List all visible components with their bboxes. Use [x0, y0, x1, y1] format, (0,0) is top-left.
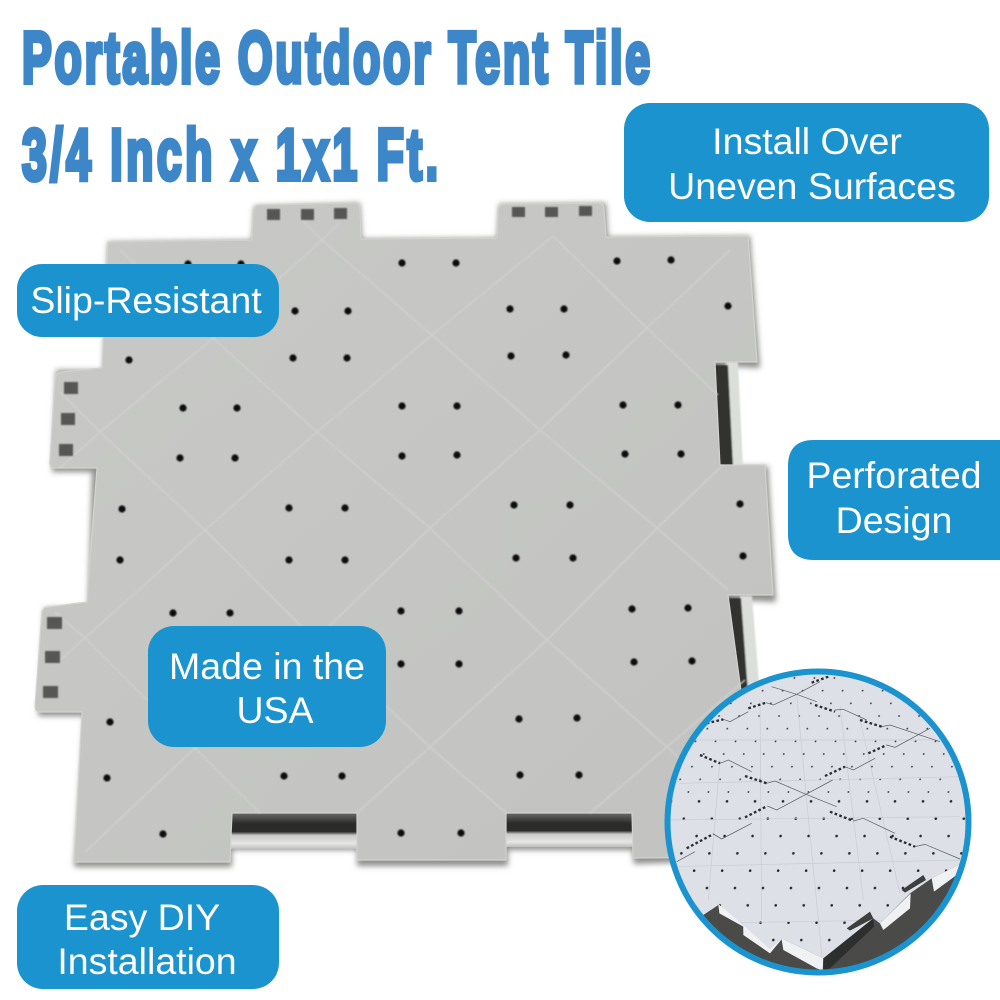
slots on the bottom edge	[230, 813, 634, 849]
floor surface	[670, 674, 966, 958]
callout: slip-resistant: Slip-Resistant	[30, 279, 262, 321]
interlock tabs with holes	[687, 677, 915, 848]
callout: made in the USA	[148, 626, 386, 747]
perforation dots near	[672, 800, 966, 942]
perforation holes	[103, 256, 747, 838]
callout: perforated design: Design	[836, 499, 952, 541]
circle frame	[668, 672, 968, 972]
title	[22, 18, 650, 195]
callout: easy DIY installation: Installation	[57, 940, 237, 982]
perforation dots far	[679, 677, 960, 793]
product photo: interlocking perforated tile	[35, 203, 776, 867]
callout: install over uneven surfaces	[624, 103, 989, 222]
title: 3/4 Inch x 1x1 Ft.	[22, 115, 438, 195]
tile drop shadow	[38, 203, 776, 867]
callout: easy DIY installation	[17, 885, 279, 989]
callout: install over uneven surfaces: Install Over	[712, 120, 902, 162]
callout: install over uneven surfaces: Uneven Surfaces	[668, 165, 956, 207]
tile diagonal grooves	[55, 218, 745, 852]
faint tile grid lines	[670, 694, 960, 970]
tile body	[35, 203, 773, 862]
callout: made in the USA: USA	[236, 689, 314, 731]
callout: perforated design: Perforated	[806, 454, 982, 496]
inset photo: installed floor in circular frame	[660, 660, 980, 985]
slots on the right edge	[714, 362, 762, 720]
callout: perforated design	[788, 440, 1000, 560]
gravel ground and side faces	[703, 864, 960, 970]
callout: easy DIY installation: Easy DIY	[64, 896, 220, 938]
square pockets on the tabs	[43, 206, 592, 698]
title: Portable Outdoor Tent Tile	[22, 18, 650, 98]
callout: slip-resistant	[17, 264, 279, 337]
callout: made in the USA: Made in the	[169, 645, 365, 687]
interlock seams	[677, 682, 960, 862]
